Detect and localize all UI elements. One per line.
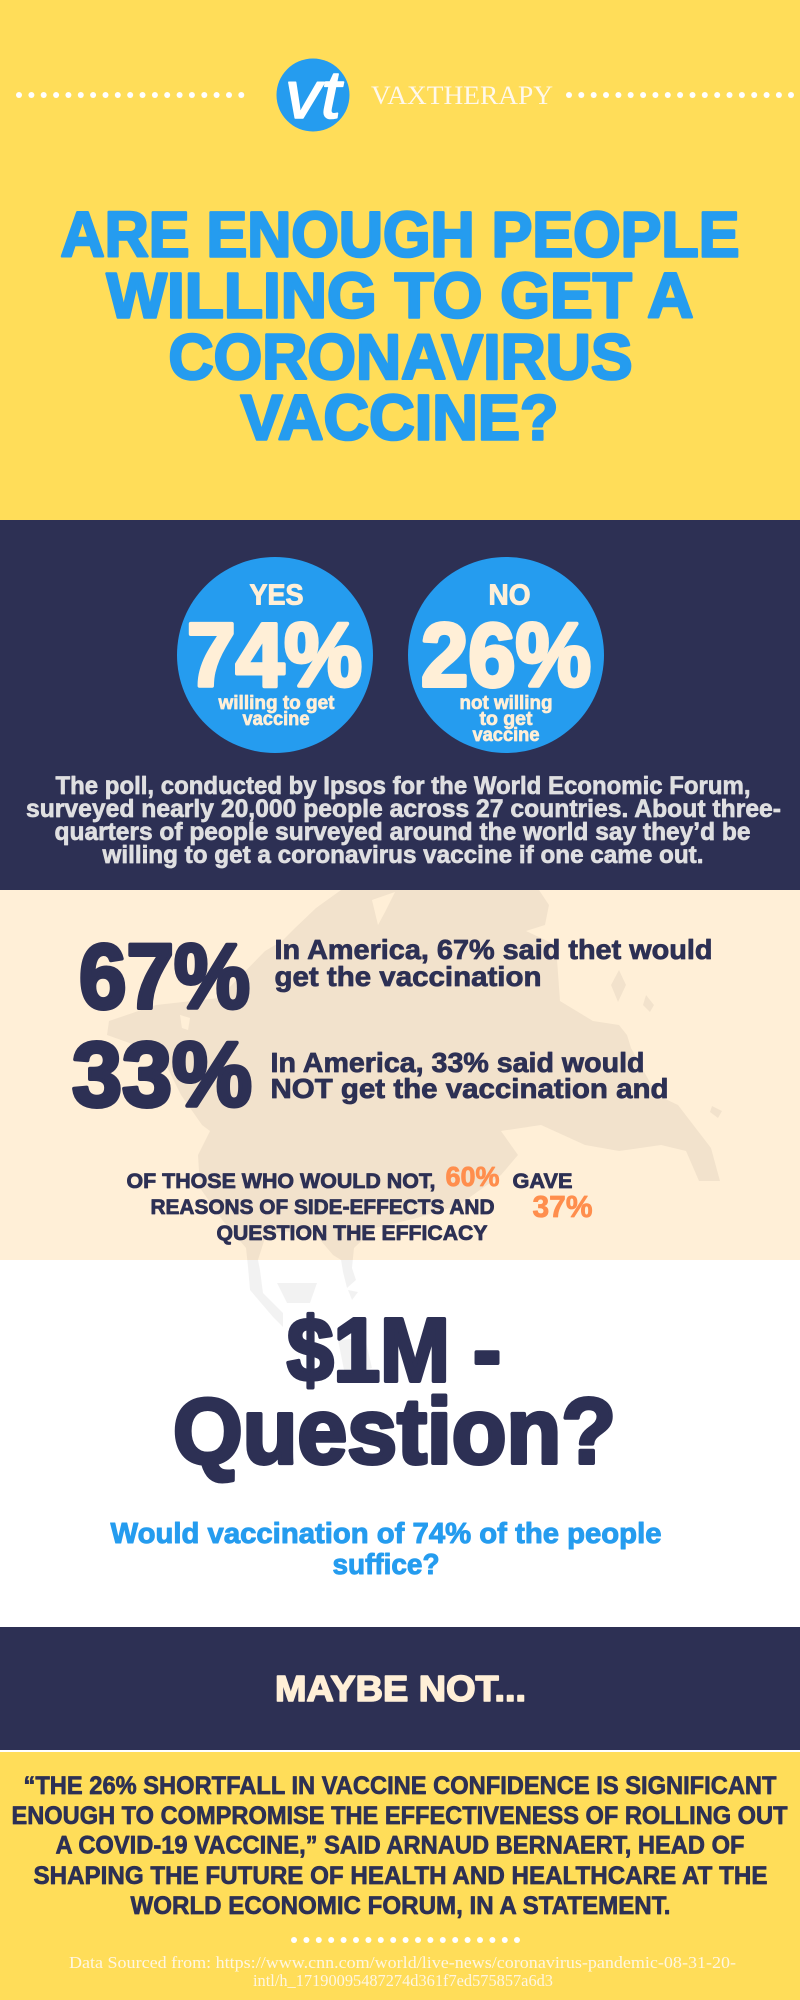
- heading: $1M question: [173, 1301, 616, 1483]
- text: reasons for refusal: REASONS OF SIDE-EFFECTS AND: [150, 1195, 494, 1219]
- source note: [69, 1953, 736, 1990]
- subheading: would vaccination suffice: [110, 1518, 662, 1581]
- stat: 67%: 67%: [79, 926, 250, 1028]
- stat circle: no 26%: to get: [480, 709, 533, 730]
- subheading: would vaccination suffice: Would vaccination of 74% of the people: [110, 1518, 662, 1550]
- stat circle: no 26%: vaccine: [472, 725, 540, 746]
- icon: vt logo: vt: [285, 57, 344, 133]
- panel: america background: [0, 890, 800, 1260]
- quote text: WORLD ECONOMIC FORUM, IN A STATEMENT.: [130, 1892, 670, 1920]
- dotted divider: [291, 1937, 520, 1943]
- panel: maybe not background: [0, 1627, 800, 1750]
- text: 67% explanation: In America, 67% said thet would: [274, 934, 712, 965]
- quote text: A COVID-19 VACCINE,” SAID ARNAUD BERNAERT, HEAD OF: [56, 1832, 744, 1860]
- brand name: VAXTHERAPY: [371, 80, 553, 110]
- poll description: surveyed nearly 20,000 people across 27 countries. About three-: [26, 795, 781, 823]
- dotted line right: [566, 92, 794, 98]
- poll description: The poll, conducted by Ipsos for the World Economic Forum,: [56, 772, 750, 800]
- text: reasons for refusal: [126, 1161, 592, 1245]
- stat circle: yes 74%: willing to get: [218, 693, 335, 714]
- text: 67% explanation: [274, 934, 712, 992]
- heading: $1M question: Question?: [173, 1379, 616, 1483]
- quote text: [12, 1772, 788, 1920]
- panel: question background: [0, 1260, 800, 1627]
- logo row: [16, 57, 794, 133]
- stat circle: no 26%: [408, 557, 604, 753]
- stat circle: yes 74%: [177, 557, 373, 753]
- heading: $1M question: $1M -: [287, 1301, 501, 1401]
- text: reasons for refusal: GAVE: [512, 1169, 572, 1193]
- stat circle: yes 74%: vaccine: [242, 709, 310, 730]
- stat: 33%: 33%: [72, 1024, 252, 1126]
- title: [60, 198, 740, 454]
- stat: 60%: 60%: [446, 1161, 500, 1192]
- world map watermark: [107, 890, 722, 1375]
- stat circle: yes 74%: YES: [250, 580, 304, 612]
- text: 33% explanation: [270, 1047, 668, 1104]
- poll description: willing to get a coronavirus vaccine if one came out.: [102, 841, 703, 869]
- panel: poll background: [0, 520, 800, 890]
- panel: quote background: [0, 1752, 800, 2000]
- title: WILLING TO GET A: [106, 260, 694, 332]
- text: 33% explanation: NOT get the vaccination and: [270, 1073, 668, 1104]
- quote text: SHAPING THE FUTURE OF HEALTH AND HEALTHCARE AT THE: [34, 1862, 768, 1890]
- text: 67% explanation: get the vaccination: [274, 961, 542, 992]
- quote text: “THE 26% SHORTFALL IN VACCINE CONFIDENCE IS SIGNIFICANT: [24, 1772, 776, 1800]
- text: reasons for refusal: QUESTION THE EFFICACY: [216, 1221, 488, 1245]
- stat circle: no 26%: NO: [488, 580, 530, 612]
- dotted line left: [16, 92, 244, 98]
- stat: 37%: 37%: [532, 1189, 592, 1224]
- panel: header background: [0, 0, 800, 520]
- stat circle: no 26%: not willing: [460, 693, 552, 714]
- stat circle: yes 74%: 74%: [187, 606, 362, 706]
- source note: intl/h_17190095487274d361f7ed575857a6d3: [253, 1971, 553, 1990]
- title: ARE ENOUGH PEOPLE: [60, 198, 740, 270]
- text: 33% explanation: In America, 33% said would: [270, 1047, 644, 1078]
- heading: maybe not: MAYBE NOT...: [275, 1668, 526, 1709]
- source note: Data Sourced from: https://www.cnn.com/world/live-news/coronavirus-pandemic-08-31-20-: [69, 1953, 736, 1972]
- poll description: [26, 772, 781, 869]
- title: VACCINE?: [240, 382, 558, 454]
- title: CORONAVIRUS: [168, 321, 632, 393]
- stat circle: no 26%: 26%: [421, 606, 591, 706]
- text: reasons for refusal: OF THOSE WHO WOULD NOT,: [126, 1169, 436, 1193]
- poll description: quarters of people surveyed around the world say they’d be: [54, 818, 751, 846]
- subheading: would vaccination suffice: suffice?: [332, 1549, 440, 1581]
